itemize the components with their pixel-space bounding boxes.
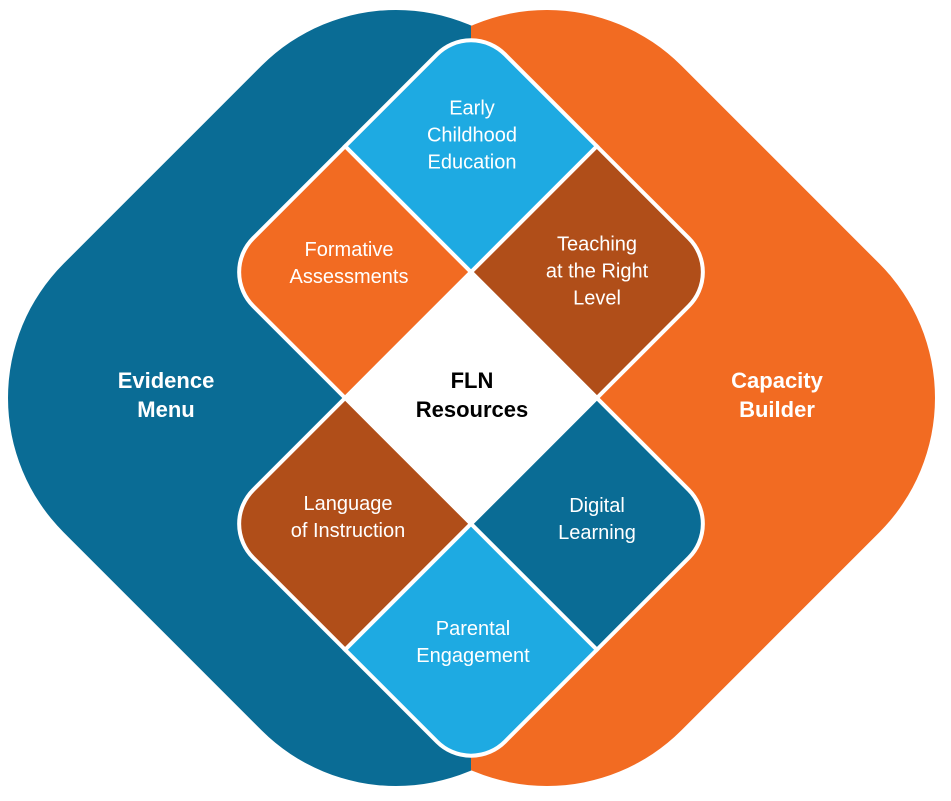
label: teaching at the right level: at the Right [546, 260, 648, 282]
label: early childhood education: Childhood [427, 124, 517, 146]
panel: evidence menu diamond [8, 10, 472, 786]
tile: language of instruction [216, 395, 474, 653]
label: teaching at the right level: Level [573, 288, 621, 310]
label: early childhood education: Early [449, 98, 495, 120]
tile: formative assessments [216, 143, 474, 401]
label: evidence menu: Menu [137, 397, 195, 422]
label: evidence menu: Evidence [118, 368, 214, 393]
label: capacity builder: Builder [739, 397, 815, 422]
panel: capacity builder diamond [471, 10, 935, 786]
label: capacity builder [731, 368, 823, 422]
label: parental engagement [416, 618, 530, 667]
label: formative assessments: Assessments [290, 266, 408, 288]
tile: parental engagement [342, 521, 600, 778]
label: formative assessments [290, 239, 408, 288]
label: digital learning [558, 495, 636, 544]
label: language of instruction: Language [304, 493, 392, 515]
label: FLN resources: Resources [416, 397, 528, 422]
label: FLN resources [416, 368, 528, 422]
label: digital learning: Learning [558, 522, 636, 544]
tile: teaching at the right level [468, 143, 726, 401]
label: capacity builder: Capacity [731, 368, 823, 393]
label: evidence menu [118, 368, 214, 422]
tile: digital learning [468, 395, 726, 653]
label: parental engagement: Parental [436, 618, 510, 640]
label: early childhood education: Education [428, 152, 516, 174]
label: teaching at the right level [546, 234, 648, 310]
label: parental engagement: Engagement [416, 645, 530, 667]
label: early childhood education [427, 98, 517, 174]
label: FLN resources: FLN [451, 368, 493, 393]
tile grid [237, 38, 705, 758]
label: digital learning: Digital [569, 495, 625, 517]
tile: early childhood education [342, 18, 600, 275]
label: language of instruction: of Instruction [291, 520, 405, 542]
label: formative assessments: Formative [305, 239, 393, 261]
label: teaching at the right level: Teaching [557, 234, 637, 256]
tile: FLN resources center [342, 269, 600, 527]
label: language of instruction [291, 493, 405, 542]
